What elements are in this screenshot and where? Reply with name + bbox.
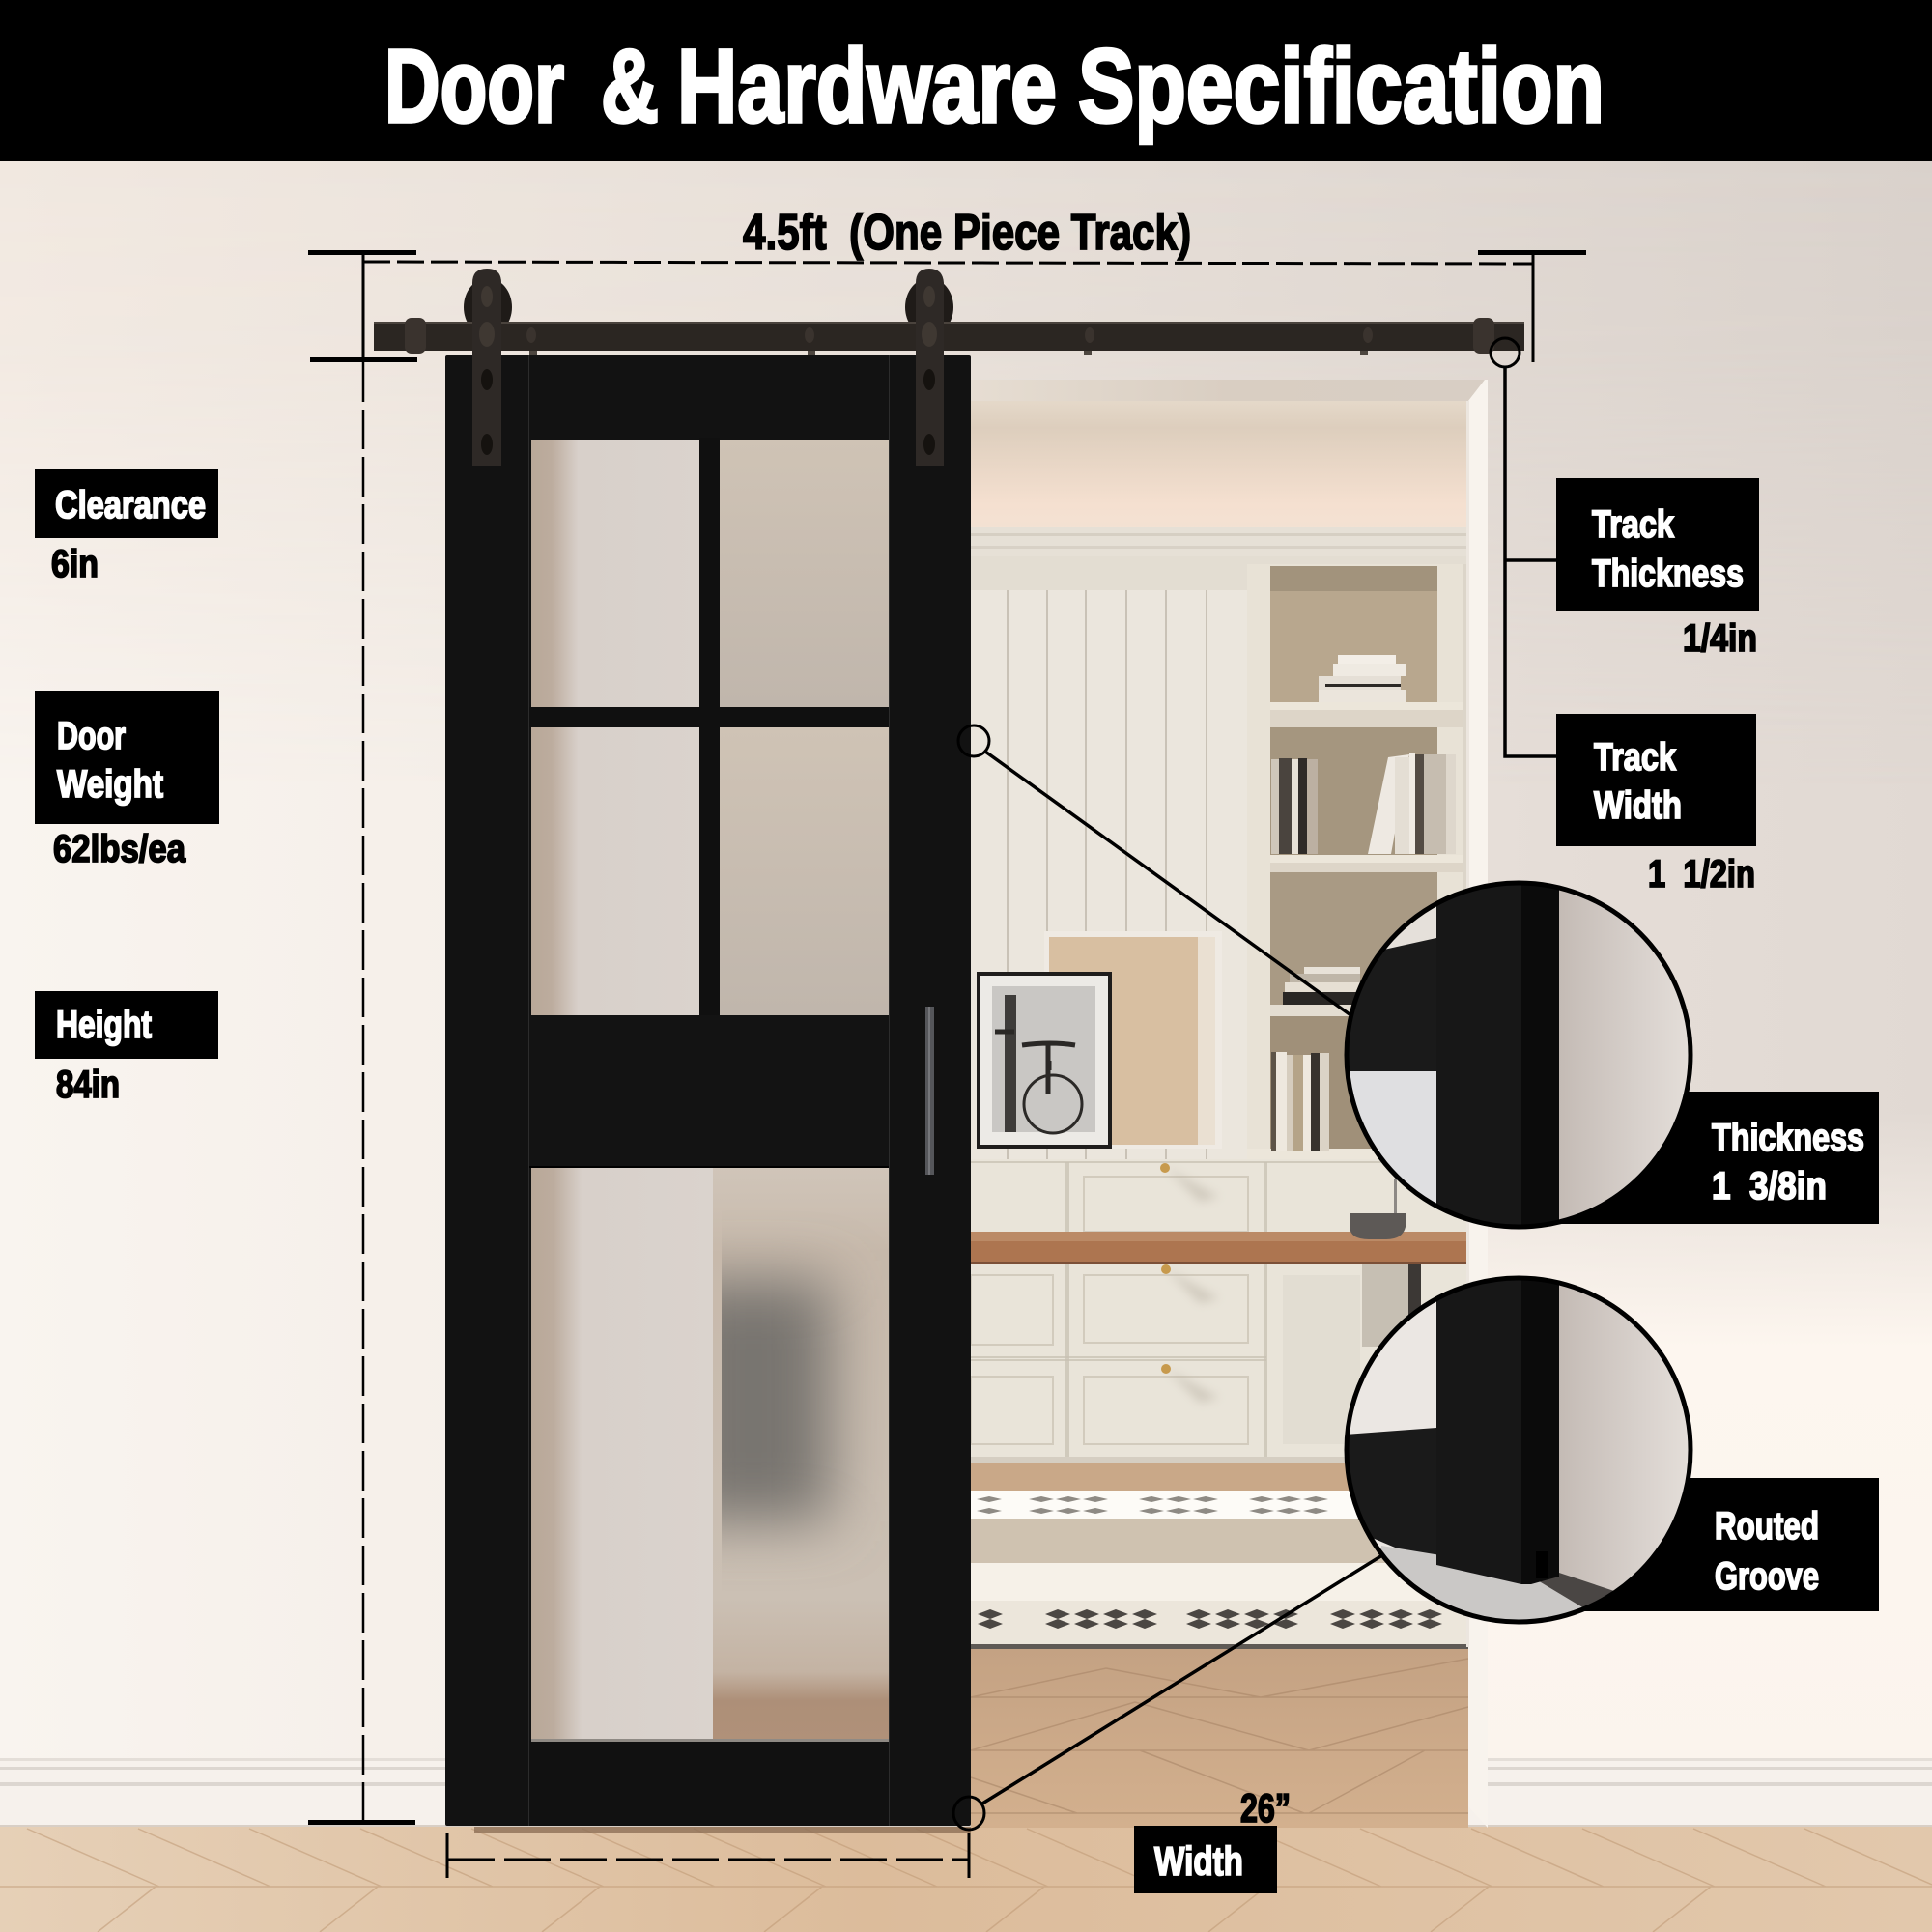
leader: door edge to thickness detail [958, 725, 1350, 1014]
crown moulding [971, 527, 1468, 590]
callout: height: Height [56, 1004, 152, 1046]
callout: track thickness: Thickness [1592, 553, 1744, 595]
right hanger strap [916, 269, 944, 466]
callout: door weight: Weight [57, 763, 163, 806]
callout: track thickness: 1/4in [1683, 617, 1757, 660]
track length label: 4.5ft (One Piece Track) [743, 205, 1191, 261]
callout: clearance [35, 469, 218, 585]
callout: track width [1556, 714, 1756, 895]
callout: height [35, 991, 218, 1106]
leader: door bottom to groove detail [953, 1555, 1382, 1830]
title: Specification [1078, 27, 1605, 144]
right door jamb [1466, 380, 1488, 1828]
clearance and height dimension [308, 252, 417, 1825]
callout: door weight: Door [57, 715, 126, 757]
callout: track width: Width [1594, 784, 1682, 827]
callout: thickness [1546, 1092, 1879, 1224]
callout: track width: 1 1/2in [1648, 853, 1755, 895]
callout: width: Width [1154, 1838, 1243, 1884]
title: & [601, 27, 659, 144]
baseboard [0, 1758, 1932, 1827]
callout: thickness: Thickness [1712, 1117, 1864, 1159]
callout: clearance: Clearance [55, 484, 206, 526]
upper glass panes [531, 440, 889, 1015]
detail circle: door thickness [1345, 881, 1694, 1231]
door pull handle [925, 1007, 934, 1175]
track bolts and stops [405, 318, 1494, 355]
callout: door weight: 62lbs/ea [53, 828, 186, 870]
muntins and rail edges [528, 355, 890, 1826]
callout: routed groove: Groove [1715, 1555, 1819, 1598]
room seen through doorway [971, 380, 1488, 1828]
track length dimension [308, 205, 1586, 362]
wooden desk top [971, 1232, 1468, 1264]
title [384, 27, 1605, 144]
detail circle: routed groove [1345, 1275, 1694, 1633]
track marker leader lines [1491, 338, 1556, 756]
title bar [0, 0, 1932, 161]
books [1271, 655, 1456, 1151]
title: Hardware [677, 27, 1057, 144]
callout: clearance: 6in [51, 543, 99, 585]
callout: routed groove: Routed [1715, 1505, 1819, 1548]
barn door track [374, 318, 1524, 355]
bowl on desk [1350, 1179, 1406, 1239]
leaning art print [1044, 931, 1222, 1149]
left hanger strap [472, 269, 501, 466]
door width dimension [446, 1833, 970, 1878]
callout: routed groove [1546, 1478, 1879, 1611]
wall background [4, 161, 1932, 1565]
callout: width: 26” [1240, 1785, 1291, 1831]
bookcase [1247, 564, 1468, 1163]
callout: track width: Track [1594, 736, 1677, 779]
sliding barn door [445, 355, 971, 1833]
callout: track thickness: Track [1592, 503, 1675, 546]
title: Door [384, 27, 564, 144]
floor [0, 1827, 1932, 1932]
callout: door weight [35, 691, 219, 870]
hanger wheels behind the track [464, 278, 953, 336]
callout: width [1134, 1785, 1291, 1893]
framed bicycle photo [977, 972, 1112, 1149]
callout: track thickness [1556, 478, 1759, 660]
panelled wall [971, 590, 1251, 1160]
door opening soffit [971, 380, 1485, 401]
lower cabinets [971, 1159, 1468, 1463]
callout: thickness: 1 3/8in [1712, 1165, 1827, 1208]
ceiling glow [971, 382, 1468, 536]
room floor and rug [971, 1463, 1468, 1828]
callout: height: 84in [56, 1064, 120, 1106]
lower frosted glass [531, 1168, 889, 1741]
